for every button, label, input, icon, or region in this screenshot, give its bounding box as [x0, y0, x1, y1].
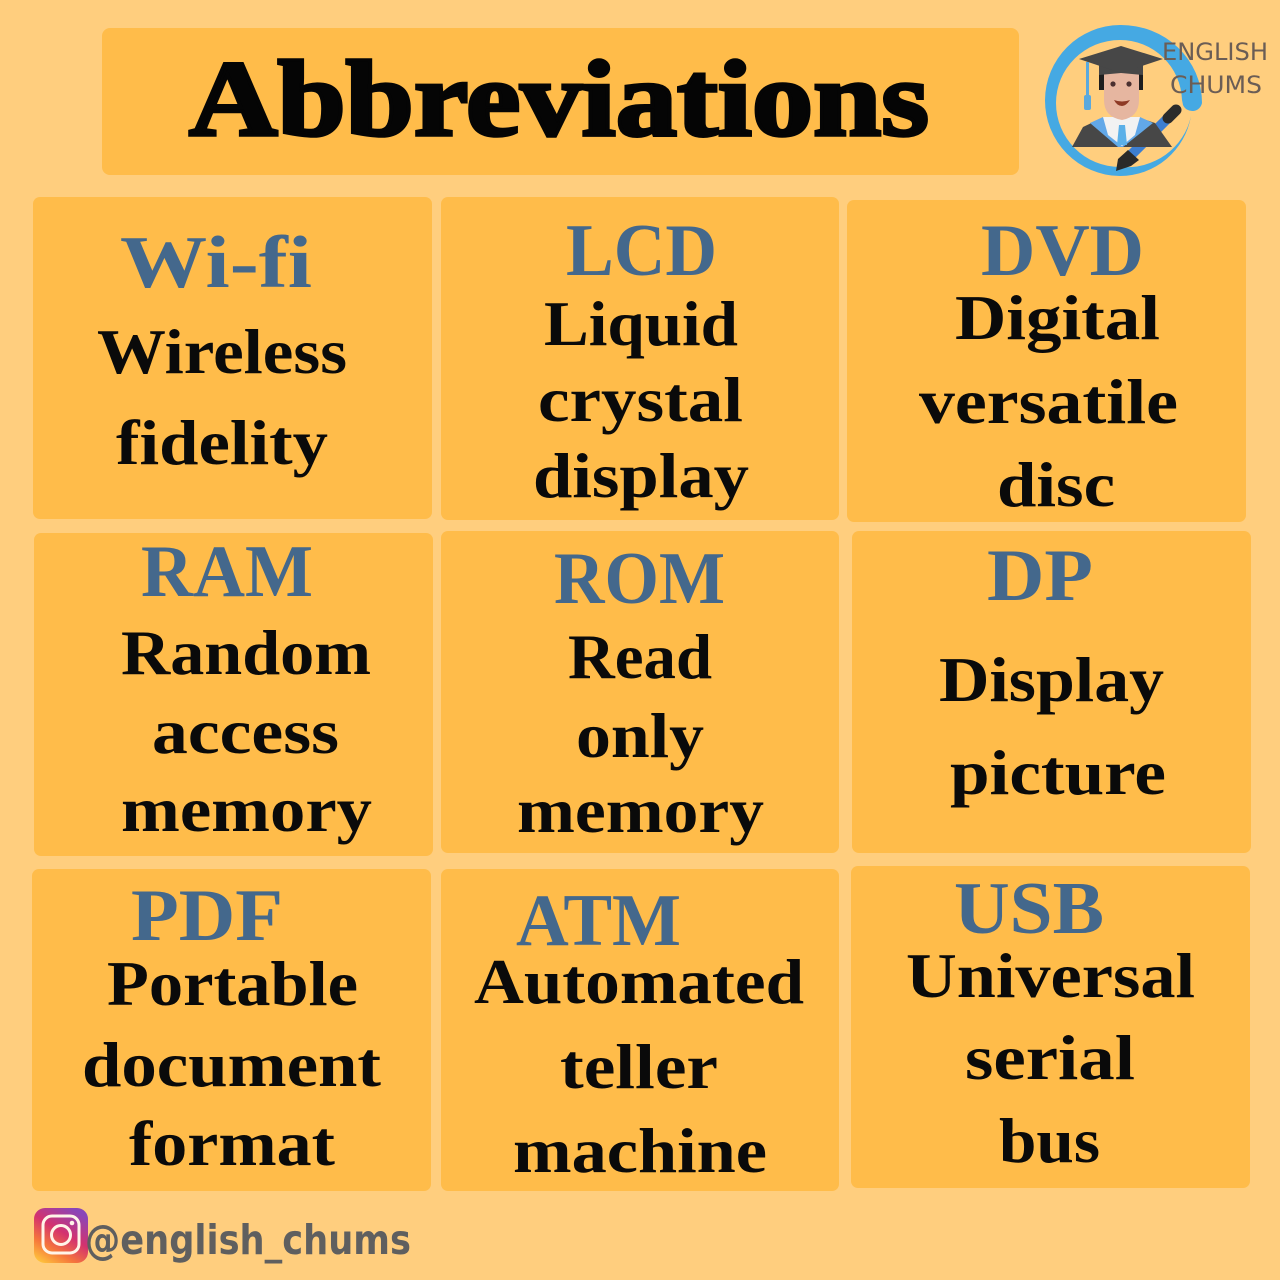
panel: PDF [32, 869, 431, 1191]
panel: ROM: memory [517, 776, 764, 846]
panel: LCD [441, 197, 839, 520]
panel: USB: serial [965, 1023, 1135, 1093]
Instagram handle: @english_chums [85, 1216, 411, 1264]
logo: English Chums [1045, 25, 1268, 176]
panel: USB: USB [954, 868, 1104, 950]
panel: PDF: Portable [107, 949, 358, 1019]
title banner: Abbreviations [189, 40, 929, 159]
panel: USB: Universal [906, 941, 1195, 1011]
panel: DP: Display [939, 645, 1164, 715]
panel: ROM: only [576, 701, 704, 771]
fountain pen [1116, 110, 1176, 171]
panel: DP: picture [950, 738, 1166, 808]
panel: ATM: Automated [474, 947, 804, 1017]
logo text: ENGLISH [1162, 38, 1268, 66]
panel: PDF: document [82, 1030, 381, 1100]
panel: ATM: teller [560, 1032, 718, 1102]
panel: DP [852, 531, 1251, 853]
panel: PDF: PDF [131, 875, 283, 957]
panel: RAM: Random [121, 618, 371, 688]
panel: PDF: format [129, 1109, 335, 1179]
panel: RAM: access [152, 697, 339, 767]
panel: Wi-fi [33, 197, 432, 519]
panel: DVD: DVD [981, 210, 1144, 292]
panel: RAM: RAM [141, 531, 313, 613]
panel: DVD: versatile [919, 367, 1178, 437]
panel: DVD: Digital [955, 283, 1160, 353]
panel: USB [851, 866, 1250, 1188]
panel: ATM: ATM [516, 880, 681, 962]
panel: USB: bus [999, 1106, 1100, 1176]
logo: English Chums: CHUMS [1170, 71, 1262, 99]
title banner [102, 28, 1019, 175]
panel: RAM: memory [121, 775, 372, 845]
panel: DVD [847, 200, 1246, 522]
panel: LCD: Liquid [544, 289, 738, 359]
graduate figure [1072, 46, 1172, 147]
panel: Wi-fi: fidelity [116, 408, 328, 478]
icon: Instagram [34, 1208, 88, 1263]
panel: RAM [34, 531, 433, 856]
panel: LCD: crystal [538, 365, 743, 435]
panel: LCD: LCD [566, 210, 717, 292]
panel: ATM [441, 869, 839, 1191]
logo ring [1045, 25, 1202, 176]
panel: ROM: ROM [554, 538, 725, 620]
panel: DP: DP [987, 535, 1093, 617]
panel: LCD: display [533, 441, 749, 511]
panel: Wi-fi: Wireless [97, 317, 347, 387]
panel: DVD: disc [997, 450, 1115, 520]
panel: Wi-fi: Wi-fi [120, 222, 312, 304]
panel: ROM [441, 531, 839, 853]
panel: ROM: Read [568, 622, 712, 692]
panel: ATM: machine [513, 1116, 767, 1186]
